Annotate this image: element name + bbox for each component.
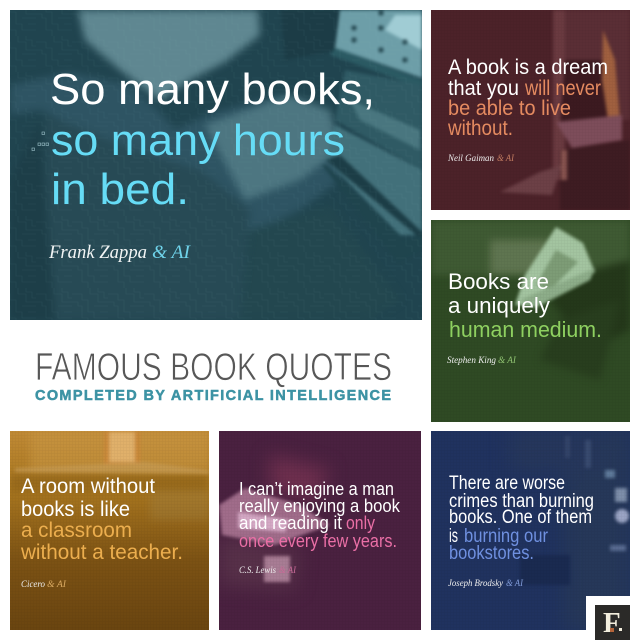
quote text: Lewis: I can’t imagine a man (239, 479, 394, 499)
author: C.S. Lewis and AI: C.S. Lewis (239, 566, 276, 576)
panel: Frank Zappa quote (10, 10, 422, 320)
quote text: Gaiman: will never (524, 77, 601, 100)
quote text: Brodsky (449, 473, 594, 564)
quote text: King: human medium. (449, 317, 602, 342)
photo: bookstore shelves (520, 436, 630, 585)
quote text: King: Books are (448, 269, 549, 294)
quote text: Gaiman (447, 56, 608, 140)
quote text: main: so many hours (51, 116, 345, 165)
author: Frank Zappa and AI: & AI (152, 242, 192, 263)
panel: Neil Gaiman quote (431, 10, 630, 210)
quote text: Brodsky: burning our (464, 526, 549, 547)
quote text: Brodsky: bookstores. (449, 543, 534, 564)
quote text: Brodsky: crimes than burning (449, 491, 594, 512)
quote text: Gaiman: be able to live (448, 97, 571, 120)
quote text: Cicero: A room without (21, 475, 155, 498)
quote text: Brodsky: is (449, 526, 458, 547)
author: C.S. Lewis and AI (239, 566, 297, 576)
author: Frank Zappa and AI: Frank Zappa (48, 242, 147, 263)
author: Stephen King and AI: Stephen King (447, 356, 496, 366)
logo: F. badge (586, 596, 640, 640)
quote text: main: So many books, (50, 65, 375, 114)
quote text: Gaiman: that you (448, 77, 519, 100)
quote text: Lewis (239, 479, 401, 551)
photo: empty classroom (10, 431, 210, 520)
author: Frank Zappa and AI (48, 242, 192, 263)
author: Cicero and AI (21, 580, 67, 590)
quote text: Cicero (20, 475, 183, 564)
panel: Cicero quote (10, 431, 210, 630)
quote text: Cicero: without a teacher. (20, 541, 183, 564)
quote text: Cicero: a classroom (21, 519, 132, 542)
quote text: King (448, 269, 602, 342)
logo: F. badge: F (603, 607, 621, 639)
author: Stephen King and AI: & AI (498, 356, 517, 366)
quote text: King: a uniquely (448, 293, 550, 318)
author: C.S. Lewis and AI: & AI (279, 566, 297, 576)
quote text: Gaiman: A book is a dream (448, 56, 608, 79)
quote text: Brodsky: There are worse (449, 473, 565, 494)
quote text: main: in bed. (51, 165, 189, 214)
quote text: Lewis: really enjoying a book (239, 496, 401, 516)
photo: person reading in bed (10, 10, 422, 236)
quote text: Gaiman: without. (447, 117, 513, 140)
panel: Stephen King quote (431, 220, 630, 422)
quote text: main (50, 65, 375, 214)
author: Neil Gaiman and AI: & AI (497, 154, 515, 164)
author: Cicero and AI: Cicero (21, 580, 45, 590)
subtitle: COMPLETED BY ARTIFICIAL INTELLIGENCE (35, 388, 391, 404)
quote text: Cicero: books is like (21, 498, 130, 521)
quote text: Lewis: only (346, 513, 375, 533)
photo: reader and candle (219, 455, 330, 590)
title: FAMOUS BOOK QUOTES (35, 346, 392, 389)
author: Joseph Brodsky and AI: Joseph Brodsky (448, 579, 504, 589)
author: Neil Gaiman and AI: Neil Gaiman (447, 154, 494, 164)
quote text: Brodsky: books. One of them (449, 507, 592, 528)
author: Cicero and AI: & AI (47, 580, 67, 590)
quote text: Lewis: once every few years. (239, 531, 397, 551)
panel: C.S. Lewis quote (219, 431, 421, 630)
quote text: Lewis: and reading it (239, 513, 342, 533)
panel: Joseph Brodsky quote (431, 431, 630, 630)
photo: reader by a window (500, 10, 630, 210)
author: Joseph Brodsky and AI: & AI (506, 579, 524, 589)
icon: circuit dots (32, 132, 48, 150)
photo: open book against a brick wall (431, 220, 630, 380)
